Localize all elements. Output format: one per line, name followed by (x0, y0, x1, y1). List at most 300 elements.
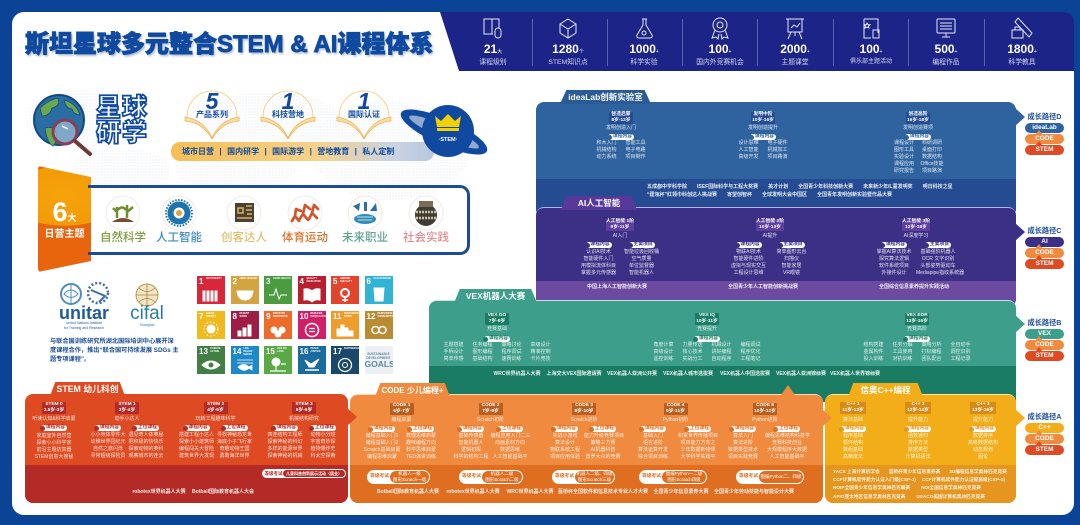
column: VEX GO: 简单传感 (443, 356, 464, 362)
header stats band (440, 12, 1074, 71)
column: intermediate: 发明创造提升 (748, 125, 778, 131)
column: VEX GO: 高级设计 (530, 342, 550, 348)
title: 斯坦星球多元整合STEM & AI课程体系 (25, 31, 433, 58)
competitions band: YACS 上海计算机学会 (833, 469, 880, 474)
competitions band (25, 465, 348, 503)
legend: growth path C: 成长路径C (1028, 226, 1061, 235)
column: CODE 4: 课程内容 (645, 426, 664, 431)
heading: planet research (95, 93, 148, 147)
column: VEX IQ: 高级设计 (653, 348, 674, 354)
competitions band: VEX机器人亚洲锦标赛 (776, 371, 826, 377)
column: CODE 4: 综合项目训练 (638, 454, 668, 460)
SDG 7 (197, 311, 225, 339)
competitions band: 中国上海人工智能创新大赛 (587, 284, 647, 290)
column: C++ 3: 动态规划 (973, 447, 993, 453)
column: intermediate: 人工智能 (738, 147, 758, 153)
exam and competition band (350, 465, 823, 503)
column: AI level 1: 课程内容 (590, 242, 610, 247)
column: C++ 3 (968, 402, 998, 460)
column: CODE 4: 语言进阶 (643, 440, 663, 446)
badge: 5 product lines (184, 88, 240, 140)
column: VEX IQ: 讲好编程 (711, 348, 732, 354)
SDG 5: GENDER EQUALITY (340, 277, 352, 283)
stat: competitions: 国内外竞赛机会 (696, 59, 744, 66)
flag: 6 daily camp themes: 日营主题 (44, 229, 84, 240)
competition names (350, 489, 823, 497)
column: CODE 2: 动画素材方向 (495, 440, 525, 446)
column: VEX IQ: VEX IQ (699, 313, 715, 318)
competition names: 全国青少年劳动技能与智能设计大赛 (714, 489, 794, 495)
legend: growth path A (1025, 412, 1064, 455)
column: intermediate: 高级开发 (738, 154, 758, 160)
column: VEX IQ: 遥控训练 (653, 356, 674, 362)
column: CODE 5: 算法进阶 (733, 440, 753, 446)
column: VEX EDR: 工程记录 (950, 356, 970, 362)
column: CODE 5: 课程内容 (735, 426, 754, 431)
SDG 9 (264, 311, 292, 339)
logo: CIFAL: cifal (130, 303, 164, 324)
competitions band: ISEF国际科学与工程大奖赛 (697, 184, 758, 190)
SDG 17 (331, 346, 359, 374)
column: VEX GO: 7岁-9岁 (489, 319, 505, 324)
badge: 1 tech camp (260, 88, 316, 140)
arrow: STEM to CODE (348, 409, 357, 425)
exam pill 4: 图形Scratch四级 (667, 477, 701, 482)
column: C++ 2: 函数递归 (908, 433, 928, 439)
column: AI level 3: 主要项目 (930, 242, 949, 247)
column: AI level 3: 头部姿势驱动车 (920, 262, 956, 268)
SDG 14 (230, 346, 258, 374)
column: CODE 3: 策略三方赛 (590, 440, 616, 446)
competitions band: 上海交大VEX国际邀请赛 (546, 371, 602, 377)
column: STEM 2: 上位课程 (226, 425, 246, 430)
column: STEM 1: 观察城市的连云 (128, 453, 164, 459)
column: STEM 1: 把积极的快快乐 (128, 439, 164, 445)
column: STEM 0: 2.5岁-3岁 (44, 408, 64, 413)
column: C++ 1 (839, 402, 866, 460)
SDG 16: PEACE JUSTICE (310, 347, 321, 353)
column: intermediate: 电子硬件 (767, 140, 788, 146)
competitions band: 明日科技之星 (923, 184, 953, 190)
SDG 12: 12 (366, 312, 375, 321)
column: STEM 2: 海底小子飞行家 (217, 439, 252, 445)
column: CODE 3: 上位课程 (595, 426, 614, 431)
competitions band: NOIP全国青少年信息学奥林匹克联赛 (833, 485, 910, 490)
column: STEM 0: 课程内容 (46, 425, 65, 430)
legend: growth path A: STEM (1035, 446, 1054, 453)
column: VEX EDR: 调控识别 (950, 348, 970, 354)
column: C++ 2: 排序方法 (908, 440, 928, 446)
column: STEM 1: 上位课程 (138, 425, 157, 430)
stat: course levels (479, 18, 507, 66)
stat: science experiments: 科学实验 (630, 59, 658, 66)
column: CODE 3: Scratch进阶 (571, 417, 597, 423)
column: advanced: 课程应用 (894, 161, 914, 167)
column: AI level 2: 人工智能 2阶 (756, 219, 784, 224)
exam pill 1 (367, 470, 430, 484)
column: CODE 5: 上位课程 (779, 426, 798, 431)
column: AI level 2: AI提升 (763, 233, 777, 239)
column: VEX EDR: 工具使用 (892, 348, 912, 354)
stat: science tools (1007, 17, 1037, 66)
column: VEX IQ: 竞赛提升 (697, 326, 717, 332)
column: CODE 3: CODE 3 (575, 403, 593, 408)
tab: STEM (50, 382, 124, 394)
competitions band: 3D编程信息学奥林匹克竞赛 (949, 469, 1007, 474)
column: AI level 2: 10岁-13岁 (759, 225, 781, 230)
column: STEM 0: 前沿主题仿真器 (36, 446, 72, 452)
icon: STEM planet: ·STEM· (439, 137, 458, 143)
SDG 10: 10 (300, 312, 308, 321)
SDG 6 (364, 276, 392, 304)
flag: 6 daily camp themes: 6大 (52, 197, 77, 227)
column: advanced: 图形工具 (894, 147, 914, 153)
column: CODE 4: 大学科学实践平 (680, 454, 716, 460)
exam pill: 儿童科普创新展示活动（展业） (286, 470, 342, 476)
column: STEM 3: 探索神秘的机械 (267, 453, 302, 459)
column: AI level 3: 掌握AI算法技术 (877, 248, 911, 254)
column: AI level 3: 外接件设计 (881, 270, 906, 276)
column: STEM 3: 机械结构研究 (289, 416, 319, 422)
column: advanced: 数据结构 (922, 154, 942, 160)
column: CODE 2: 智能机器人 (458, 440, 484, 446)
SDG wordmark: DEVELOPMENT (366, 356, 391, 360)
column: STEM 3: 植物爆炸史 (310, 446, 336, 452)
arrow: AI to path C (1016, 224, 1025, 240)
column: CODE 4: 少年数据新物课 (680, 446, 716, 452)
theme: sports: 体育运动 (282, 232, 328, 244)
column: AI level 2: 智能家居 (781, 262, 802, 268)
column: CODE 1: 6岁-7岁 (393, 409, 410, 414)
column: advanced: 课程内容 (910, 134, 929, 139)
column: STEM 1 (89, 402, 165, 460)
column: STEM 1: STEM 1 (118, 402, 136, 407)
column: STEM 0: 家庭室外自然营 (36, 432, 72, 438)
column: AI level 3: Mediapipe指纹系统器 (916, 270, 964, 276)
column: beginner: 发明创造入门 (606, 125, 636, 131)
column: intermediate (738, 110, 788, 160)
column: STEM 2: 搭建工程小达人 (179, 432, 214, 438)
column: CODE 4: 上位课程 (690, 426, 709, 431)
column: C++ 2: 12岁-14岁 (907, 408, 929, 413)
stat: science tools: 科学教具 (1008, 59, 1036, 66)
legend: growth path C: CODE (1035, 249, 1054, 256)
column: STEM 1: 自然之旅闪烁 (93, 446, 123, 452)
column: VEX IQ: 工程笔记 (740, 356, 760, 362)
column: VEX GO: VEX GO (488, 313, 506, 318)
column: CODE 5: 大规模程序大数据 (767, 446, 807, 452)
arrow: CODE up to VEX (781, 385, 795, 395)
stat: competitions (696, 18, 744, 66)
legend: growth path A: CODE (1035, 435, 1054, 442)
column: C++ 2 (904, 402, 931, 460)
column: AI level 1: 单位监督器 (629, 262, 654, 268)
competition names: WRC世界机器人大赛 (507, 489, 553, 495)
program bar (171, 142, 434, 161)
SDG 5: 5 (333, 277, 337, 286)
column: C++ 3: C++ 3 (976, 402, 990, 407)
theme: social practice (403, 196, 449, 244)
stat: coding works: 编程作品 (932, 59, 960, 66)
column: VEX GO: 图形编程 (472, 348, 492, 354)
logo: CIFAL (130, 284, 164, 327)
column: VEX IQ: 10岁-11岁 (696, 319, 718, 324)
column: advanced: 创造高阶 (908, 112, 928, 117)
flag: 6 daily camp themes (38, 166, 91, 272)
heading: planet research: 研学 (96, 119, 148, 147)
column: advanced: 科研调研 (922, 140, 942, 146)
column: AI level 1: 智能机器人 (629, 270, 654, 276)
column: STEM 3: 科太空探索 (310, 453, 336, 459)
column: intermediate: 课程内容 (755, 134, 774, 139)
SDG 14: LIFE BELOW WATER (244, 347, 252, 356)
column: CODE 5: CODE 5 (756, 403, 774, 408)
legend: growth path B (1025, 318, 1064, 361)
column: AI level 3: AI深度学习 (904, 233, 928, 239)
column: AI level 3: 探究算法逻辑 (879, 256, 909, 262)
SDG 10 (298, 311, 326, 339)
competitions band: “建瓴杯”红领巾科创达人挑战赛 (647, 192, 717, 198)
column: CODE 5: 算法入门 (733, 432, 753, 438)
column: STEM 0: STEM 0 (45, 402, 63, 407)
column: STEM 3: 多样的能源世界 (267, 446, 302, 452)
column: advanced: 项目路演 (922, 168, 942, 174)
column: CODE 5: 编程思维结构科技学 (765, 432, 810, 438)
column: beginner: 电子电路 (625, 147, 646, 153)
SDG 2: 2 (232, 277, 237, 286)
competitions band: VEX机器人中国选拔赛 (720, 371, 770, 377)
column: STEM 0: 探索小小科学家 (36, 440, 72, 446)
stat: theme classes: 2000+ (780, 42, 810, 56)
column: STEM 1: 3岁-4岁 (119, 408, 135, 413)
column: C++ 3: 课程内容 (975, 426, 994, 431)
badge: 5 product lines: 产品系列 (196, 110, 228, 119)
column: CODE 2: 编程应用入门二三 (490, 432, 531, 438)
badge: 5 product lines: 5 (206, 88, 218, 114)
SDG 9: INDUSTRY INNOVATION (273, 312, 288, 318)
column: STEM 1: 课程内容 (100, 425, 119, 430)
column: C++ 1: 高精度法 (843, 454, 863, 460)
column: STEM 0: 听读认知&科学启蒙 (32, 416, 76, 422)
column: AI level 1: 智能垃圾回收桶 (624, 248, 659, 254)
column: CODE 1: 趣味编程方向 (406, 440, 436, 446)
icon: STEM planet (400, 105, 488, 157)
panel: ideaLab (536, 102, 1016, 217)
column: CODE 1: 数理思维启蒙 (406, 432, 436, 438)
column: VEX EDR (863, 313, 970, 362)
column: CODE 1: TED演讲训练 (406, 454, 436, 460)
tab: C++: 信奥C++编程 (860, 385, 911, 395)
column: CODE 5 (721, 403, 809, 460)
badge: 1 international certification: 国际认证 (348, 110, 380, 119)
column: STEM 2: 探索小小建筑师 (179, 439, 214, 445)
column: STEM 3 (266, 402, 342, 460)
column: CODE 1: 编程思维启蒙 (367, 454, 397, 460)
SDG 9: 9 (266, 312, 270, 321)
logo: UNITAR: unitar (59, 303, 109, 323)
badge: 1 tech camp: 1 (282, 88, 294, 114)
column: CODE 1 (364, 403, 436, 460)
column: advanced (894, 110, 944, 174)
legend: growth path D: CODE (1035, 135, 1054, 142)
column: AI level 3: 12岁-16岁 (905, 225, 927, 230)
SDG 8: DECENT WORK (240, 312, 249, 318)
SDG 5 (331, 276, 359, 304)
text: UN partnership note (50, 337, 179, 363)
SDG 14: 14 (232, 347, 241, 356)
stat: competitions: 100+ (709, 42, 731, 56)
column: AI level 1: 9岁-11岁 (611, 225, 629, 230)
competition names: 全国青少年信息素养大赛 (653, 489, 709, 495)
competitions band: APIO亚太地区信息学奥林匹克竞赛 (833, 494, 905, 499)
icon: globe with magnifier (33, 94, 92, 156)
arrow: CODE to C++ (823, 410, 832, 426)
column: VEX GO: 速赛训练 (501, 356, 522, 362)
SDG 7: CLEAN ENERGY (206, 312, 216, 318)
column: beginner: 智造启蒙 (611, 112, 631, 117)
theme: sports (282, 196, 328, 244)
SDG 3 (264, 276, 292, 304)
logo: UNITAR (59, 282, 110, 330)
column: AI level 1: 空气质量 (631, 256, 652, 262)
column: C++ 3: 提升能力 (973, 417, 993, 423)
column: STEM 0 (29, 402, 79, 460)
arrow: VEX to path B (1016, 316, 1025, 332)
badge: 1 international certification: 1 (358, 88, 370, 114)
column: AI level 3: 人工智能 3阶 (902, 219, 930, 224)
competitions band: 全国青年发明创新实验暨作品大赛 (817, 192, 892, 198)
column: VEX IQ: 核心技术 (682, 348, 702, 354)
column: STEM 2: 编程闯关大冒险 (179, 446, 214, 452)
panel: C++ (825, 394, 1016, 503)
SDG 4 (298, 276, 326, 304)
panel: CODE (350, 394, 823, 503)
exam pill 3: 等级考试 (555, 474, 574, 479)
column: VEX GO: 基础结构 (472, 356, 492, 362)
column: VEX IQ: 自动程序 (711, 356, 732, 362)
column: STEM 0: STEM创意大搜秘 (35, 454, 73, 460)
column: AI level 2: 虚拟与现实交互 (731, 262, 766, 268)
exam pill 4: 图编Python一二级 (666, 471, 702, 476)
legend: growth path B: CODE (1035, 341, 1054, 348)
column: CODE 4 (630, 403, 720, 460)
theme: artificial intelligence (156, 196, 202, 244)
column: AI level 1: 认识AI技术 (586, 248, 611, 254)
column: STEM 3: STEM 3 (295, 402, 313, 407)
legend: growth path B: 成长路径B (1028, 318, 1061, 327)
SDG 13 (197, 346, 225, 374)
SDG wordmark (364, 346, 392, 374)
column: AI level 1 (581, 218, 659, 276)
competition names: Botball国际教育机器人大赛 (377, 489, 439, 495)
SDG 12 (364, 311, 392, 339)
background world map dots (26, 90, 468, 200)
column: beginner: 动力系统 (596, 154, 616, 160)
stat: club activities: 俱乐部主题活动 (850, 59, 892, 65)
column: AI level 2: 智能硬件进阶 (733, 256, 764, 262)
legend: growth path D: 成长路径D (1028, 112, 1061, 121)
column: CODE 3 (550, 403, 624, 460)
competition names: robotex世界机器人大赛 (446, 489, 500, 495)
column: beginner: 积木入门 (596, 140, 616, 146)
column: C++ 3: 数据排序 (973, 433, 993, 439)
column: CODE 1: CODE 1 (393, 403, 410, 408)
competitions band: 全国青少年人工智能创新挑战赛 (728, 284, 798, 290)
column: intermediate: 10岁-16岁 (752, 118, 774, 123)
column: AI level 3: 课程内容 (886, 242, 905, 247)
column: CODE 3: 算法设计 (555, 440, 575, 446)
column: CODE 4: 积累世界传播项目 (678, 432, 718, 438)
column: AI level 2: 课程内容 (740, 242, 760, 247)
column: CODE 3: 课程内容 (557, 426, 576, 431)
exam pill 5: 图编Python二、四级 (760, 474, 802, 479)
column: STEM 3: 上位课程 (315, 425, 334, 430)
legend: growth path B: VEX (1038, 330, 1051, 337)
column: CODE 3: 8岁-10岁 (574, 409, 594, 414)
SDG 17: 17 (333, 347, 342, 356)
column: VEX EDR: 对抗训练 (892, 356, 912, 362)
competitions band: CCF计算机软件能力认证入门级(CSP-J) (833, 477, 916, 482)
column: VEX GO: 任务编程 (472, 342, 492, 348)
column: STEM 2: 奇趣动物王国 (219, 446, 250, 452)
competitions band: Botball国际教育机器人大会 (192, 489, 254, 495)
column: C++ 1: 算法基础 (843, 417, 863, 423)
SDG 8 (230, 311, 258, 339)
column: advanced: 桌面打印 (922, 147, 942, 153)
legend: growth path D: ideaLab (1032, 124, 1057, 131)
column: VEX GO: 手柄设计 (443, 348, 464, 354)
column: VEX EDR: 结构搭建 (863, 342, 884, 348)
text: UN partnership note: 与联合国训练研究所湖北国际培训中心展开深 (50, 338, 174, 345)
column: AI level 1: 主要项目 (633, 242, 653, 247)
tab: CODE: CODE 少儿编程+ (381, 386, 444, 395)
column: C++ 1: C++ 1 (846, 402, 860, 407)
column: advanced: Office技能 (920, 161, 943, 167)
column: advanced: 课程设计 (894, 140, 914, 146)
SDG 13: CLIMATE ACTION (210, 347, 220, 353)
column: VEX EDR: 团队配合 (921, 356, 942, 362)
logo: UNITAR: for Training and Research (64, 326, 104, 330)
column: STEM 2: STEM 2 (207, 402, 224, 407)
panel: AI (536, 207, 1016, 307)
column: beginner: 项目制作 (625, 154, 646, 160)
column: STEM 2: 建筑世界大发现 (179, 453, 214, 459)
SDG 2 (230, 276, 258, 304)
column: VEX EDR: VEX EDR (906, 313, 928, 318)
column: beginner: 8岁-12岁 (611, 118, 631, 123)
theme: natural science: 自然科学 (100, 232, 146, 244)
badge: 1 tech camp: 科技营地 (272, 110, 304, 119)
SDG 1 (197, 276, 225, 304)
SDG 8: 8 (232, 312, 237, 321)
column: VEX EDR: 金属构件 (863, 348, 884, 354)
column: CODE 2: CODE 2 (482, 403, 499, 408)
tab: VEX: VEX机器人大赛 (466, 291, 525, 301)
column: beginner: 课程内容 (613, 134, 632, 139)
column: C++ 2: 数据类型 (908, 447, 928, 453)
tab: C++ (848, 383, 922, 395)
column: AI level 1: 人工智能 1阶 (606, 219, 634, 224)
column: VEX IQ: 程序优化 (740, 348, 760, 354)
column: CODE 5: Python进阶 (752, 417, 778, 423)
tab: ideaLab (560, 90, 651, 104)
column: CODE 4: 基础入门 (643, 432, 663, 438)
stat: theme classes: 主题课堂 (781, 59, 809, 66)
legend: growth path A: 成长路径A (1028, 412, 1061, 421)
tab: ideaLab: ideaLab创新实验室 (568, 92, 643, 102)
exam pill 1: 等级考试 (370, 474, 389, 479)
theme: maker: 创客达人 (221, 232, 267, 244)
